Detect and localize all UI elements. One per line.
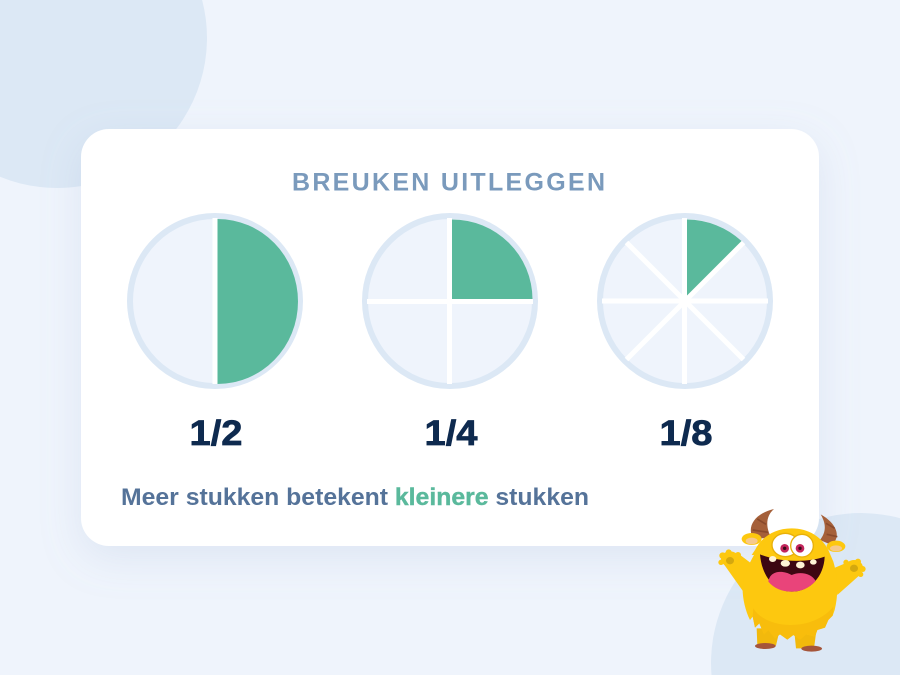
monster legs [757,628,817,648]
chart: one quarter [365,216,535,386]
chart: one half [130,216,300,386]
panel: card [81,129,819,546]
monster ears [742,533,845,552]
caption: Meer stukken betekent kleinere stukken [121,484,589,511]
monster feet [755,643,822,652]
icon: yellow monster [718,509,866,652]
chart: one eighth [600,216,770,386]
monster arms and hands [718,549,866,595]
monster fur shade [753,607,833,640]
monster mouth [760,554,825,592]
monster horns [751,509,837,545]
label: 1/8: 1/8 [660,414,712,453]
monster body [743,528,837,640]
label: 1/2: 1/2 [190,414,242,453]
label: 1/4: 1/4 [424,414,478,453]
title: BREUKEN UITLEGGEN [292,168,605,196]
monster eyes [772,533,813,557]
monster hand pads [726,557,858,572]
